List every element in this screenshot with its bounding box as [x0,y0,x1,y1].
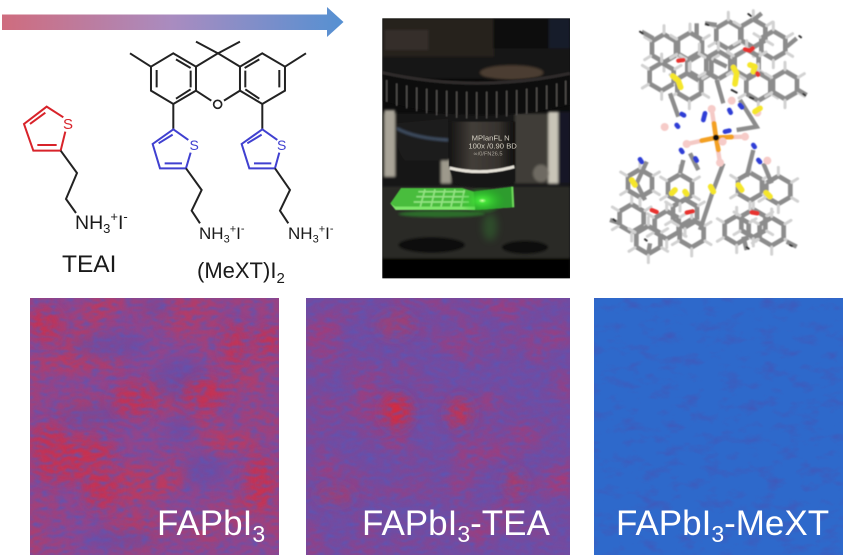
TEAI sulfur label: S [63,116,73,133]
background behind objective [382,113,570,190]
blue thiophene rings [153,129,279,168]
side objective [420,137,448,162]
xanthene core [130,42,306,129]
green glow [461,188,501,214]
MeXT sulfur labels: S [190,137,199,153]
FAPbI3 map panel [28,298,282,555]
red domains [306,298,570,555]
lead iodide core bonds [661,97,771,167]
lower molecules [610,150,798,263]
right ammonium label: I [325,224,330,243]
TEAI ethylammonium chain [61,151,77,213]
FAPbI3-MeXT map panel [594,298,843,555]
microscope photo [382,18,570,278]
left ammonium label: NH [199,224,224,243]
right ammonium label: - [330,223,334,235]
blue domains [60,300,227,550]
MeXT chains [186,168,290,223]
oxygen atoms [652,48,758,213]
panel label: 3 [252,521,265,547]
objective engraving: MPlanFL N [472,133,510,142]
MeXT name: (MeXT)I [197,258,276,283]
right ammonium label: NH [288,224,313,243]
MeXT sulfur labels [190,137,286,153]
panel label: -MeXT [724,504,829,543]
knurled focus ring [382,73,570,119]
MeXT sulfur labels: S [277,137,286,153]
objective engraving: ∞/0/FN26.5 [474,151,503,157]
panel label: -TEA [470,504,551,543]
terminal hydrogens [613,14,805,249]
MeXT name: 2 [276,270,285,287]
panel label: FAPbI [157,504,252,543]
objective engraving [468,135,516,156]
FAPbI3-TEA map panel [306,298,570,555]
left ammonium label: + [230,224,236,236]
TEAI ammonium label: + [110,209,118,224]
upper-left molecule [642,23,727,117]
upper-right molecule [699,11,807,130]
left ammonium label: - [241,223,245,235]
panel label: 3 [711,521,724,547]
right ammonium label: + [319,224,325,236]
TEAI ammonium label: I [118,212,123,234]
left ammonium label: 3 [224,234,230,246]
TEAI ammonium label: 3 [103,221,110,236]
(MeXT)I2 structure [130,42,334,287]
objective lens [449,122,515,188]
TEAI structure [24,107,128,278]
molecular model [610,11,807,263]
blue speckle [306,298,570,555]
left ammonium label: I [236,224,241,243]
glowing green slide [390,187,513,241]
panel label: 3 [457,521,470,547]
panel label: FAPbI [362,504,457,543]
gradient arrow [2,7,344,37]
TEAI ammonium label: NH [75,212,103,234]
right ammonium label: 3 [313,234,319,246]
microscope upper body [382,48,569,79]
faint speckle [594,298,843,555]
hot spots [315,311,525,505]
TEAI ammonium label: - [123,209,128,224]
red domains [30,298,279,555]
red thiophene ring [24,107,65,151]
nitrogen atoms [640,105,760,162]
panel label: FAPbI [616,504,711,543]
objective engraving: 100x /0.90 BD [468,142,517,151]
stage [382,187,570,258]
sulfur atoms [632,65,770,197]
base edge [382,258,570,278]
blue speckle [30,298,279,555]
TEAI name: TEAI [62,251,116,278]
hot spots [28,307,282,510]
